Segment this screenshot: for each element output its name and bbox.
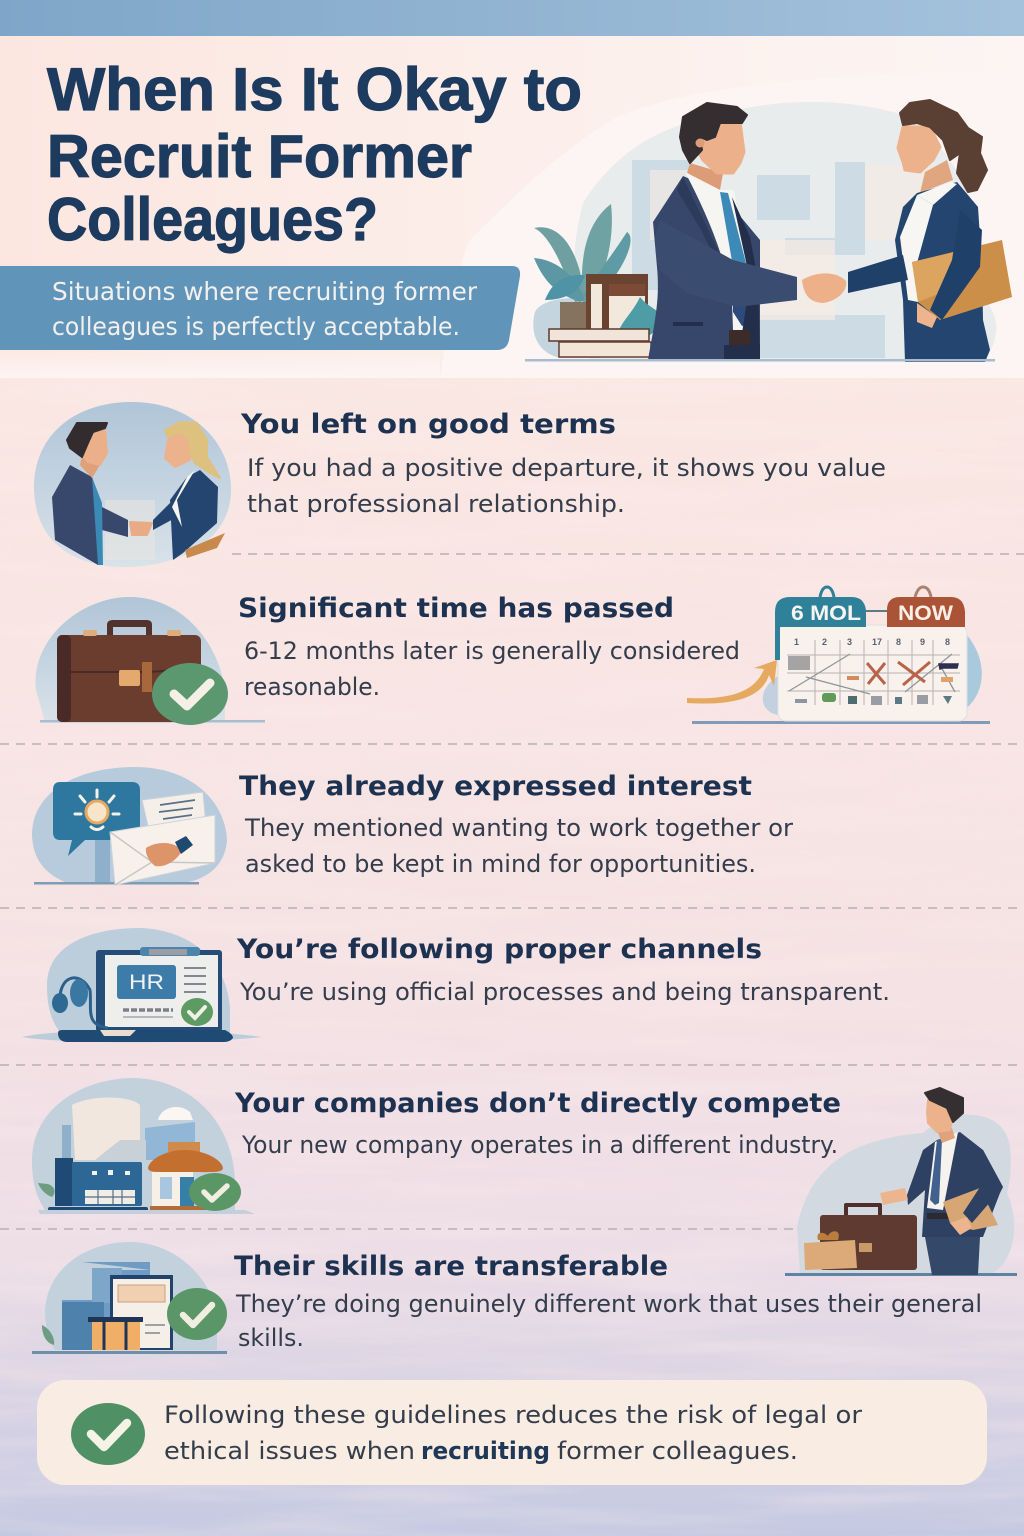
icon: calendar 6 months to now with arrow: 17 [872,637,882,647]
title: Recruit Former [47,123,472,190]
man [648,103,797,360]
icon: calendar 6 months to now with arrow: 8 [945,637,950,647]
icon: calendar 6 months to now with arrow [687,587,990,724]
heading: They already expressed interest [239,771,752,802]
description: If you had a positive departure, it shows you value [247,454,886,482]
item 2: significant time passed [36,587,990,725]
description [235,1290,982,1352]
ground line [525,359,995,362]
divider lines [0,554,1024,1229]
title: When Is It Okay to [47,56,582,123]
description [244,637,740,701]
title [47,56,582,253]
item 1: left on good terms [34,402,886,567]
icon: green check [71,1403,145,1465]
item 4: proper channels [22,928,890,1042]
illustration: man with briefcases [785,1088,1017,1276]
heading: You left on good terms [240,409,616,440]
callout: summary [37,1380,987,1485]
header panel [0,36,1024,378]
item 3: already expressed interest [32,767,793,885]
icon: laptop with HR screen: HR [129,971,164,994]
icon: calendar 6 months to now with arrow: NOW [898,602,953,625]
description: that professional relationship. [247,490,625,518]
item 5: companies don't compete [32,1078,1017,1276]
icon: building with document and check [32,1242,227,1354]
icon: handshake in circle [34,402,231,567]
description [247,454,886,518]
callout text: ethical issues when [164,1437,415,1465]
icon: calendar 6 months to now with arrow: 6 MOL [791,602,861,625]
icon: briefcase with check [36,597,265,725]
icon: calendar 6 months to now with arrow: 2 [822,637,827,647]
top band [0,0,1024,36]
callout text [164,1401,862,1465]
subtitle band: colleagues is perfectly acceptable. [52,312,460,341]
description: asked to be kept in mind for opportunities. [245,850,756,878]
description: reasonable. [244,673,380,701]
heading: Their skills are transferable [234,1251,668,1282]
plant and books [534,204,663,357]
icon: factory and shop [32,1078,255,1214]
heading: Your companies don’t directly compete [234,1088,841,1119]
description: Your new company operates in a different industry. [241,1131,838,1159]
icon: calendar 6 months to now with arrow: 9 [920,637,925,647]
heading: You’re following proper channels [236,934,762,965]
icon: calendar 6 months to now with arrow: 1 [794,637,799,647]
heading: Significant time has passed [238,593,674,624]
icon: laptop with HR screen [22,928,262,1042]
illustration: handshake between two professionals [525,100,1012,362]
icon: idea bubble and envelope [32,767,227,885]
icon: calendar 6 months to now with arrow: 8 [896,637,901,647]
icon: calendar 6 months to now with arrow: 3 [847,637,852,647]
callout text: Following these guidelines reduces the risk of legal or [164,1401,862,1429]
callout text: recruiting [421,1437,550,1465]
description: You’re using official processes and being transparent. [239,978,890,1006]
item 6: skills transferable [32,1242,982,1354]
subtitle band [0,266,520,350]
description: They’re doing genuinely different work that uses their general [235,1290,982,1318]
title: Colleagues? [47,186,378,253]
description: They mentioned wanting to work together or [244,814,793,842]
woman [848,100,1012,362]
description: 6-12 months later is generally considered [244,637,740,665]
description [244,814,793,878]
handshake hands [802,273,846,303]
description: skills. [238,1324,304,1352]
callout text: former colleagues. [557,1437,798,1465]
subtitle band: Situations where recruiting former [52,277,478,306]
